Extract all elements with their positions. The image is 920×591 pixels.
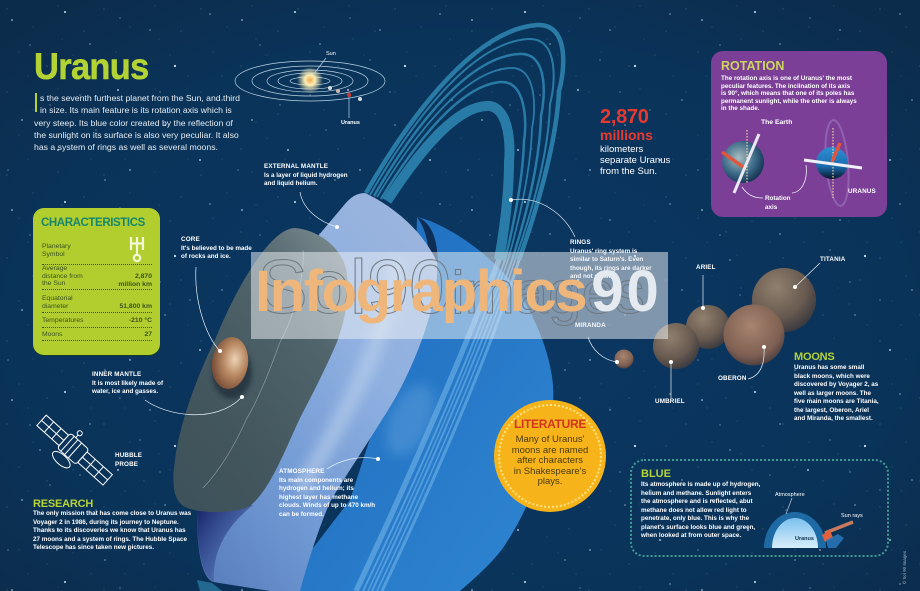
callout: inner mantle: It is most likely made of bbox=[92, 380, 163, 386]
label: sun rays: Sun rays bbox=[841, 513, 863, 519]
callout: atmosphere: can be formed. bbox=[279, 510, 324, 518]
atmosphere diagram bbox=[764, 498, 854, 548]
rings in front of the planet bbox=[356, 260, 519, 591]
planet blue hemisphere bbox=[280, 217, 553, 591]
callout: external mantle: EXTERNAL MANTLE bbox=[264, 163, 328, 170]
literature text: in Shakespeare's bbox=[514, 466, 586, 476]
moons text block bbox=[794, 351, 879, 422]
characteristics heading: CHARACTERISTICS bbox=[41, 217, 145, 229]
moons text block: the largest, Oberon, Ariel bbox=[794, 406, 869, 414]
characteristics rows: Temperatures bbox=[42, 317, 84, 324]
callout: core: It's believed to be made bbox=[181, 244, 252, 252]
literature text: Many of Uranus' bbox=[516, 434, 584, 445]
characteristics rows: the Sun bbox=[42, 280, 65, 287]
label: hubble probe bbox=[115, 452, 142, 468]
rotation diagram bbox=[721, 119, 862, 207]
characteristics rows: 51,800 km bbox=[119, 303, 152, 310]
mantle inner shadow bbox=[197, 505, 253, 582]
literature heading: LITERATURE bbox=[514, 417, 586, 431]
watermark bbox=[251, 252, 668, 339]
label: uranus: URANUS bbox=[848, 188, 876, 195]
characteristics rows: Moons bbox=[42, 331, 62, 338]
callout: inner mantle: INNER MANTLE bbox=[92, 371, 141, 378]
callout: rings: though, its rings are darker bbox=[570, 264, 652, 272]
stat: distance: separate Uranus bbox=[600, 155, 670, 166]
moons bbox=[614, 268, 816, 369]
external mantle band bbox=[197, 193, 437, 591]
rings behind the planet bbox=[366, 25, 563, 260]
label: oberon: OBERON bbox=[718, 375, 747, 382]
solar system diagram bbox=[235, 58, 385, 118]
blue text: helium and methane. Sunlight enters bbox=[641, 490, 751, 496]
callout: atmosphere: hydrogen and helium; its bbox=[279, 485, 354, 492]
label: atmosphere: Atmosphere bbox=[775, 492, 805, 498]
panel: blue bbox=[630, 459, 889, 557]
moons text block: black moons, which were bbox=[794, 372, 870, 380]
moons text block: MOONS bbox=[794, 351, 835, 363]
research text: Voyager 2 in 1986, during its journey to Neptune. bbox=[33, 518, 179, 526]
callout: rings: and not so wide. bbox=[570, 273, 619, 280]
characteristics rows: Planetary bbox=[42, 243, 71, 250]
rotation text: peculiar features. The inclination of its axis bbox=[721, 82, 850, 90]
moons text block: Uranus has some small bbox=[794, 364, 864, 371]
moons text block: well as larger moons. The bbox=[794, 390, 871, 396]
core shadow bbox=[212, 345, 252, 399]
label: rotation axis bbox=[765, 195, 791, 210]
callout: atmosphere: Its main components are bbox=[279, 476, 353, 484]
callout: rings: Uranus' ring system is bbox=[570, 248, 637, 254]
characteristics rows: Equatorial bbox=[42, 295, 73, 302]
intro text: s the seventh furthest planet from the Sun, and third bbox=[40, 93, 240, 103]
label: hubble probe: PROBE bbox=[115, 460, 138, 468]
characteristics rows: Average bbox=[42, 265, 67, 272]
rotation heading: ROTATION bbox=[721, 59, 784, 73]
inner mantle edge line bbox=[203, 250, 303, 488]
callout: atmosphere: highest layer has methane bbox=[279, 494, 358, 500]
watermark orange text: Infographics90 bbox=[255, 259, 662, 324]
rotation text: permanent sunlight, while the other is always bbox=[721, 98, 857, 104]
characteristics rows: distance from bbox=[42, 273, 83, 280]
inner mantle disc bbox=[173, 228, 348, 512]
rotation text: in the shade. bbox=[721, 105, 760, 112]
hemisphere cloud bbox=[376, 377, 444, 463]
rotation text: is 90°, which means that one of its poles has bbox=[721, 90, 854, 97]
intro text: has a system of rings as well as several moons. bbox=[34, 142, 218, 152]
lower left ring fragment bbox=[197, 580, 222, 591]
characteristics rows: 2,870 bbox=[135, 273, 152, 280]
intro text: the sunlight on its surface is also very peculiar. It also bbox=[34, 130, 239, 140]
literature text bbox=[512, 434, 588, 487]
research probe icon bbox=[27, 407, 120, 495]
label: umbriel: UMBRIEL bbox=[655, 398, 685, 405]
planet core bbox=[209, 335, 251, 391]
callout: atmosphere: clouds. Winds of up to 470 km/h bbox=[279, 502, 375, 509]
literature text: moons are named bbox=[512, 444, 588, 456]
title: Uranus bbox=[34, 46, 149, 87]
rotation text bbox=[721, 75, 857, 112]
blue text: methane does not allow red light to bbox=[641, 506, 747, 514]
callout: external mantle: Is a layer of liquid hydrogen bbox=[264, 172, 348, 178]
characteristics rows: million km bbox=[118, 281, 152, 288]
moons text block: discovered by Voyager 2, as bbox=[794, 381, 878, 388]
blue text: penetrate, only blue. This is why the bbox=[641, 515, 749, 522]
label: rotation axis: axis bbox=[765, 204, 777, 210]
label: ariel: ARIEL bbox=[696, 264, 716, 271]
label: the earth: The Earth bbox=[761, 119, 792, 126]
solar system labels: Sun bbox=[326, 51, 336, 57]
blue text: Its atmosphere is made up of hydrogen, bbox=[641, 481, 760, 488]
intro text: very steep. Its blue color created by the reflection of bbox=[34, 118, 233, 128]
blue text bbox=[641, 481, 760, 539]
label: miranda: MIRANDA bbox=[575, 322, 606, 329]
research text: Thanks to its discoveries we know that Uranus has bbox=[33, 527, 186, 534]
callout: external mantle bbox=[264, 163, 348, 187]
stat: distance: millions bbox=[600, 127, 653, 143]
moons text block: five main moons are Titania, bbox=[794, 398, 879, 405]
literature badge bbox=[494, 400, 606, 512]
leader lines bbox=[145, 192, 820, 469]
characteristics rows: Symbol bbox=[42, 251, 65, 258]
callout: core: CORE bbox=[181, 236, 200, 243]
callout: core: of rocks and ice. bbox=[181, 253, 231, 260]
blue text: planet's surface looks blue and green, bbox=[641, 524, 755, 530]
label: titania: TITANIA bbox=[820, 256, 845, 263]
research text: 27 moons and a system of rings. The Hubble Space bbox=[33, 536, 187, 542]
research text: RESEARCH bbox=[33, 498, 93, 510]
label: uranus: Uranus bbox=[795, 536, 814, 542]
literature text: after characters bbox=[517, 455, 583, 466]
panel: rotation bbox=[711, 51, 887, 217]
hemisphere inner shadow bbox=[417, 217, 438, 262]
label: hubble probe: HUBBLE bbox=[115, 452, 142, 459]
intro text: in size. Its main feature is its rotation axis which is bbox=[40, 105, 232, 115]
research text: The only mission that has come close to Uranus was bbox=[33, 510, 191, 517]
callout: inner mantle: water, ice and gasses. bbox=[92, 388, 158, 395]
callout: rings: similar to Saturn's. Even bbox=[570, 256, 643, 263]
research text bbox=[33, 498, 191, 551]
callout: core bbox=[181, 236, 252, 260]
mantle light streak bbox=[300, 260, 395, 490]
characteristics rows: -210 °C bbox=[129, 317, 152, 324]
drop cap bar bbox=[35, 93, 37, 112]
label: rotation axis: Rotation bbox=[765, 195, 791, 202]
rotation text: The rotation axis is one of Uranus' the most bbox=[721, 75, 852, 82]
blue text: the atmosphere and is reflected, abut bbox=[641, 498, 753, 505]
stat: distance: 2,870 bbox=[600, 106, 649, 128]
characteristics rows: 27 bbox=[144, 331, 152, 338]
callout: atmosphere bbox=[279, 468, 375, 518]
uranus label: Uranus bbox=[341, 120, 360, 126]
callout: rings: RINGS bbox=[570, 239, 591, 246]
research text: Telescope has since taken new pictures. bbox=[33, 544, 154, 551]
intro text bbox=[34, 93, 240, 152]
blue text: when looked at from outer space. bbox=[641, 532, 741, 539]
copyright: © Sol 90 Images bbox=[902, 551, 907, 584]
characteristics rows bbox=[42, 243, 152, 341]
stat: distance: from the Sun. bbox=[600, 166, 657, 177]
badge dotted ring bbox=[498, 404, 602, 508]
stat: distance: kilometers bbox=[600, 144, 643, 155]
panel: characteristics bbox=[33, 208, 160, 355]
callout: external mantle: and liquid helium. bbox=[264, 180, 318, 187]
callout: inner mantle bbox=[92, 371, 164, 395]
characteristics rows: diameter bbox=[42, 303, 68, 310]
literature text: plays. bbox=[538, 476, 562, 487]
blue heading: BLUE bbox=[641, 468, 671, 480]
stat: distance bbox=[600, 106, 670, 177]
moons text block: and Miranda, the smallest. bbox=[794, 415, 873, 422]
callout: rings bbox=[570, 239, 652, 280]
callout: atmosphere: ATMOSPHERE bbox=[279, 468, 324, 475]
